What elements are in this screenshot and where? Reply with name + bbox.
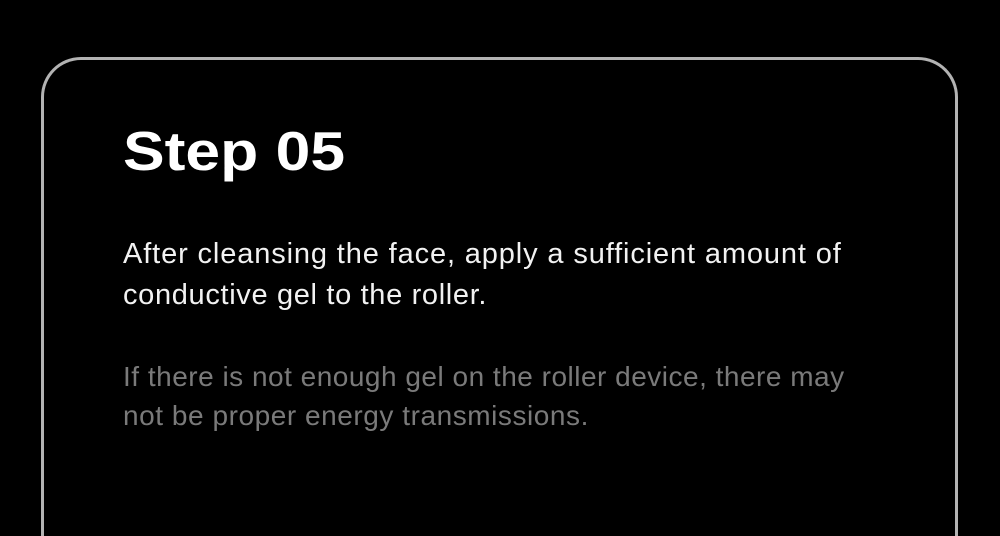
heading: step number: Step 05 [123, 120, 345, 182]
text block: note: If there is not enough gel on the roller device, there may [123, 361, 845, 392]
text block: instruction: After cleansing the face, apply a sufficient amount of [123, 238, 842, 270]
text block: note: not be proper energy transmissions. [123, 400, 589, 431]
text block: instruction [123, 238, 842, 311]
text block: note [123, 361, 845, 431]
text block: instruction: conductive gel to the roller. [123, 279, 487, 311]
